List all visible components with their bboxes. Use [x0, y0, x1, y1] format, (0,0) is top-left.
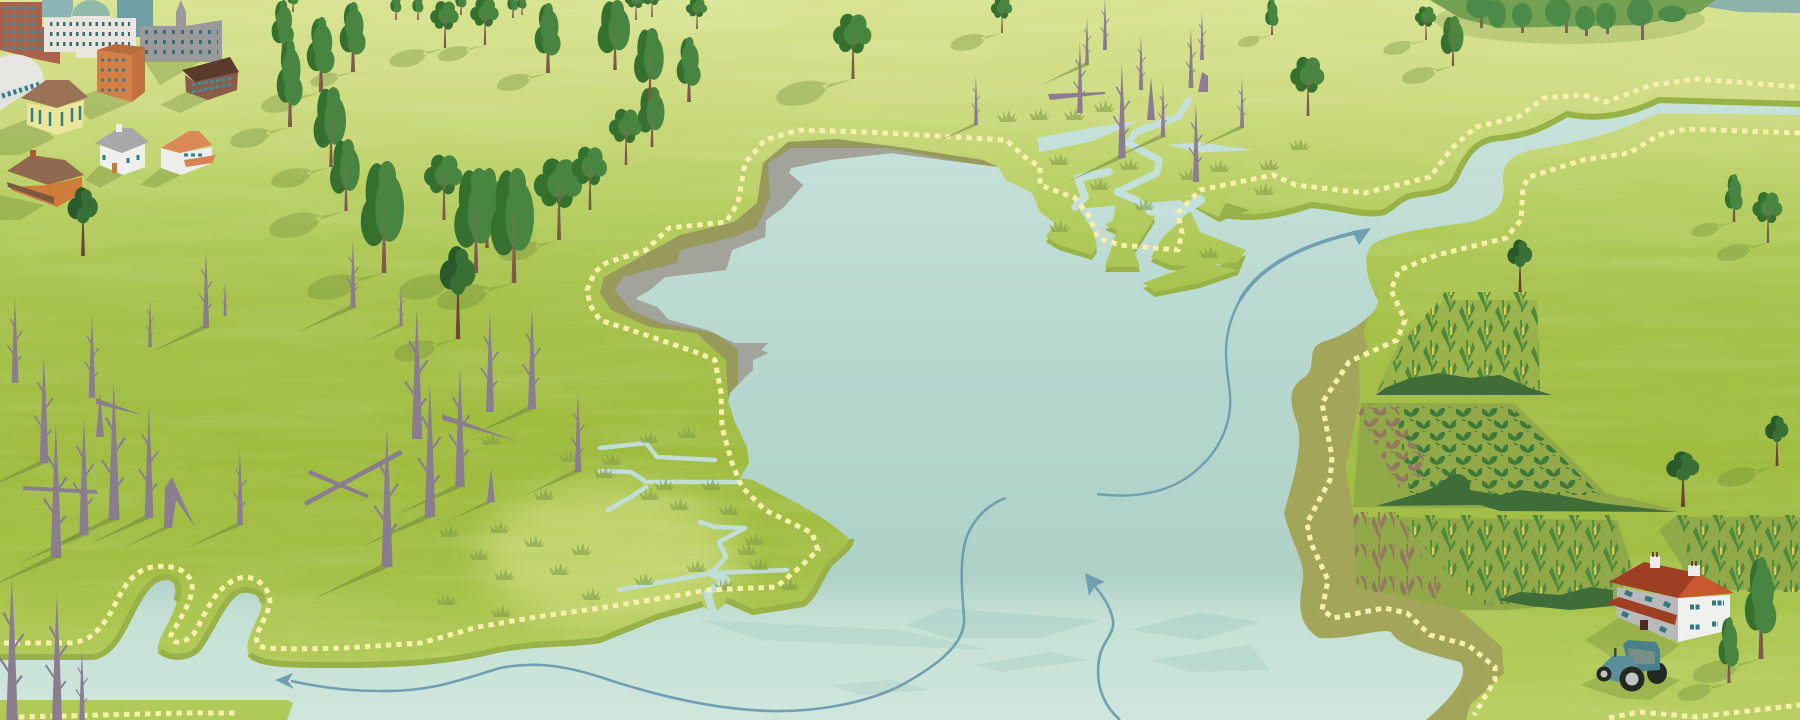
- field shadow: soy: [1353, 403, 1678, 510]
- brick tower: [0, 2, 60, 64]
- farm fields: [1353, 292, 1800, 610]
- crop: soy: [1395, 405, 1600, 495]
- lighter marsh patch: [480, 485, 740, 625]
- bottom-left land strip: [0, 700, 293, 720]
- farmhouse: [1585, 552, 1734, 675]
- yellow house: [27, 100, 84, 135]
- big brown house: [11, 177, 82, 207]
- grey eroded shoreline: [600, 139, 998, 400]
- crop: right corn: [1675, 515, 1800, 592]
- right shore olive buffer band: [1265, 290, 1504, 720]
- marsh channels lower left: [600, 443, 787, 618]
- crop: browned soy: [1353, 403, 1430, 490]
- greenhouse: [0, 54, 44, 110]
- blue towers: [42, 0, 73, 17]
- buildings: town: [0, 0, 239, 220]
- distant mountain: [1686, 0, 1800, 13]
- grass tufts: [436, 100, 1310, 617]
- hedgerows: [1376, 373, 1678, 610]
- grey castle: [140, 0, 222, 62]
- field shadow: right corn: [1659, 517, 1800, 590]
- distant forest: [1430, 0, 1715, 44]
- marsh tongues: [1030, 150, 1250, 297]
- tractor: [1580, 640, 1680, 700]
- current arrow: toward north-east river: [1097, 228, 1371, 496]
- dead trees: north marsh: [972, 0, 1246, 182]
- trees: town and west grove: [68, 0, 707, 339]
- white house with grey roof: [100, 143, 145, 175]
- crop: upper corn: [1378, 292, 1540, 390]
- field shadow: lower corn: [1353, 517, 1632, 610]
- orange brick block: [97, 50, 132, 102]
- crop: lower corn: [1395, 515, 1632, 605]
- trees beside farmhouse: [1719, 557, 1776, 683]
- trees: north and east meadow: [833, 0, 1788, 507]
- dead trees: west swamp: [0, 240, 584, 720]
- dark brown house: [185, 72, 238, 100]
- water shadows and light wedges: [700, 608, 1270, 695]
- domed white hall: [44, 0, 136, 58]
- field shadow: upper corn: [1375, 300, 1540, 395]
- river and shore lips: [0, 100, 1800, 665]
- current arrow: toward west river: [275, 498, 1006, 711]
- building shadows: [0, 62, 208, 220]
- crop: browned corn: [1353, 510, 1450, 600]
- current arrow: from south: [1085, 573, 1120, 720]
- marsh channels top: [1038, 100, 1250, 213]
- white house with orange roof: [161, 147, 212, 175]
